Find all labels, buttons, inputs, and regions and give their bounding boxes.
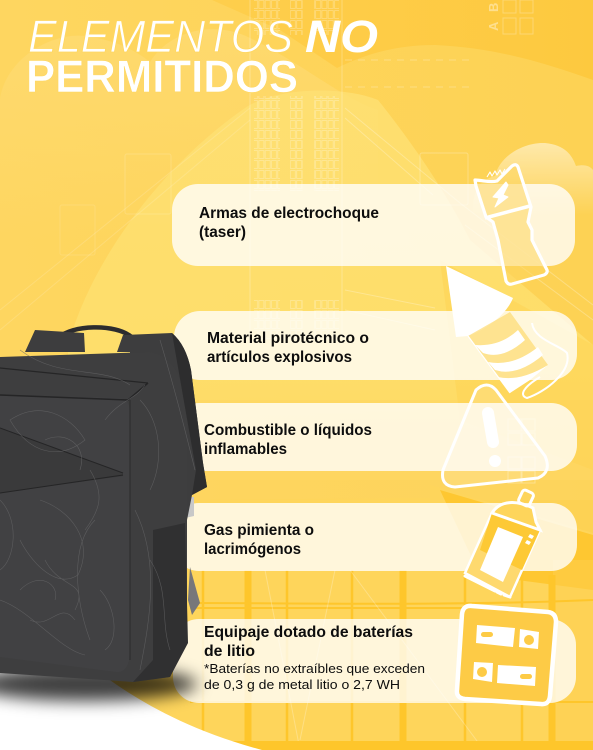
icon: firework rocket [446,266,568,398]
icon: warning triangle [442,385,547,487]
buckle [185,497,194,518]
text: pyrotechnic [207,330,369,366]
text: flammables: inflamables [204,441,287,458]
text: pyrotechnic: artículos explosivos [207,349,352,366]
text: lithium batteries: de litio [204,643,255,660]
top right darker region [212,0,593,80]
text: lithium batteries: Equipaje dotado de baterías [204,624,413,641]
text: taser: Armas de electrochoque [199,205,379,222]
cloud [473,143,593,215]
text: pepper gas: Gas pimienta o [204,522,314,539]
title: ELEMENTOS [28,11,293,62]
side pocket [133,523,188,682]
icon: spray can [465,489,540,597]
seat letter A: A [486,21,501,31]
icon: battery box [457,606,556,704]
text: lithium batteries: de 0,3 g de metal litio o 2,7 WH [204,677,400,692]
text: flammables: Combustible o líquidos [204,422,372,439]
bag shadow [0,667,197,701]
main body [0,352,187,682]
front panel [0,395,130,672]
light fuselage cone [68,91,593,480]
panel: taser [172,184,575,266]
text: pepper gas [204,522,314,558]
title [26,11,378,102]
text: lithium batteries: *Baterías no extraíbles que exceden [204,661,425,676]
panel: lithium batteries [173,619,576,703]
airplane outline [0,0,593,345]
text: pyrotechnic: Material pirotécnico o [207,330,369,347]
top handle [60,327,133,338]
floral pattern [0,340,195,670]
text: taser: (taser) [199,224,246,241]
panel: flammables [173,403,577,471]
title: PERMITIDOS [26,51,298,102]
left hump [0,29,378,240]
text: taser [199,205,379,241]
grey side strap [188,567,200,615]
text: pepper gas: lacrimógenos [204,541,301,558]
seat rows [254,0,339,340]
seat letter B: B [486,3,501,12]
panel: pepper gas [173,503,577,571]
title: NO [305,11,378,62]
text: flammables [204,422,372,458]
orange wedge and grid area [180,485,593,750]
panel: pyrotechnic [174,311,577,380]
backpack [0,327,207,682]
icon: taser [475,165,547,284]
white corner [0,673,262,750]
back straps and flap [25,330,207,525]
text: lithium batteries [204,624,425,692]
